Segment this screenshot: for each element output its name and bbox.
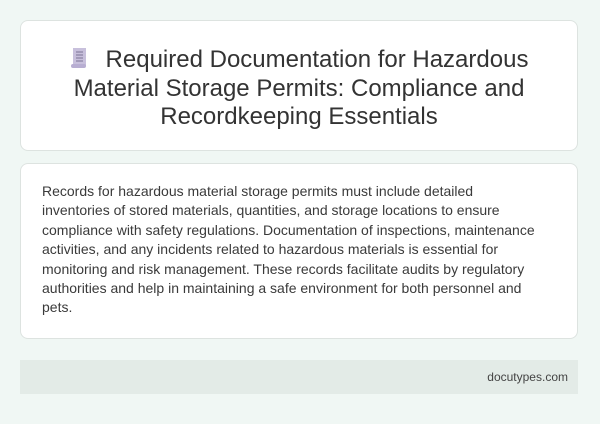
text block: Records for hazardous material storage permits must include detailed [42, 183, 473, 199]
text block [42, 183, 535, 315]
title: Recordkeeping Essentials [160, 103, 438, 130]
footer [20, 360, 578, 394]
text block: inventories of stored materials, quantities, and storage locations to ensure [42, 202, 500, 218]
text block: activities, and any incidents related to hazardous materials is essential for [42, 241, 498, 257]
text block: monitoring and risk management. These records facilitate audits by regulatory [42, 261, 524, 277]
title: Required Documentation for Hazardous [106, 46, 528, 73]
title: Material Storage Permits: Compliance and [74, 74, 524, 102]
title [71, 46, 528, 130]
icon: document [71, 48, 86, 68]
text block: compliance with safety regulations. Documentation of inspections, maintenance [42, 222, 535, 238]
panel: description [20, 163, 578, 339]
text block: pets. [42, 299, 72, 315]
panel: title [20, 20, 578, 151]
text block: authorities and help in maintaining a safe environment for both personnel and [42, 280, 521, 296]
footer: docutypes.com [487, 370, 568, 384]
